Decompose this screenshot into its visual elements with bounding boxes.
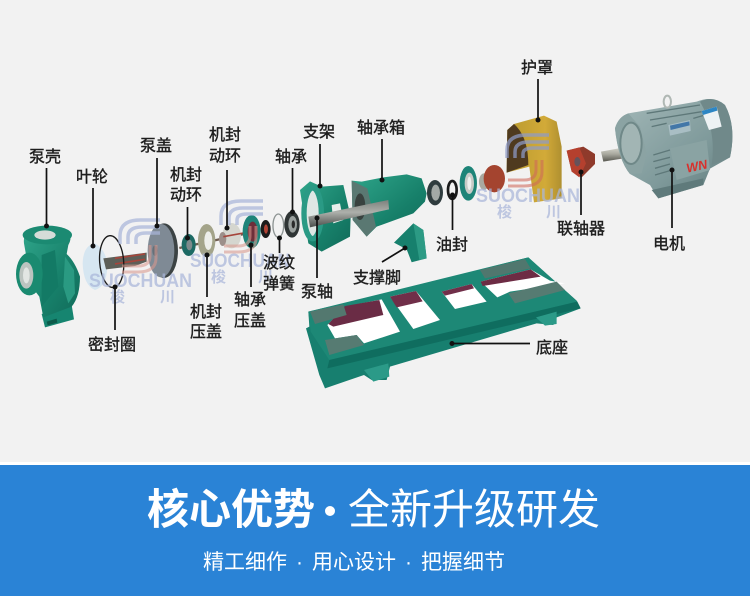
watermark: left bbox=[89, 220, 192, 306]
label: 轴承压盖 bbox=[234, 242, 266, 330]
pump casing bbox=[16, 226, 80, 327]
bracket, pump shaft and bearing housing bbox=[300, 174, 427, 252]
watermark: right: 梭 bbox=[497, 203, 512, 221]
banner subtitle: · bbox=[296, 551, 303, 574]
coupling guard bbox=[507, 116, 562, 202]
label: 护罩 bbox=[521, 59, 553, 122]
label: 机封动环 left: 动环 bbox=[170, 186, 202, 204]
label: 机封动环 upper: 动环 bbox=[209, 147, 241, 165]
banner subtitle: 把握细节 bbox=[421, 551, 505, 574]
label: 泵壳: 泵壳 bbox=[29, 148, 61, 166]
label: 泵壳 bbox=[29, 148, 61, 228]
background panel bbox=[0, 0, 750, 462]
label: 轴承: 轴承 bbox=[275, 148, 307, 166]
label: 叶轮: 叶轮 bbox=[76, 168, 108, 186]
label: 底座: 底座 bbox=[536, 339, 568, 357]
banner subtitle bbox=[203, 551, 505, 574]
electric motor bbox=[601, 96, 732, 198]
banner headline: 全新升级研发 bbox=[348, 486, 600, 533]
blue banner bbox=[0, 465, 750, 596]
watermark: right: 川 bbox=[546, 204, 561, 221]
banner subtitle: · bbox=[405, 551, 412, 574]
watermark: left: SUOCHUAN bbox=[89, 270, 192, 292]
watermark: left: 川 bbox=[160, 289, 175, 306]
label: 电机 bbox=[653, 168, 685, 253]
label: 叶轮 bbox=[76, 168, 108, 248]
label: 波纹弹簧: 波纹 bbox=[263, 254, 295, 272]
label: 机封动环 upper: 机封 bbox=[209, 126, 241, 144]
label: 联轴器: 联轴器 bbox=[557, 220, 605, 238]
label: 轴承箱 bbox=[357, 119, 405, 182]
label: 油封: 油封 bbox=[436, 236, 468, 254]
motor brand: WN bbox=[685, 157, 709, 176]
label: 机封动环 left bbox=[170, 166, 202, 240]
label: 机封压盖 bbox=[190, 252, 222, 341]
watermark: center: 梭 bbox=[211, 268, 226, 286]
label: 波纹弹簧 bbox=[263, 236, 295, 293]
watermark: right: SUOCHUAN bbox=[476, 185, 580, 207]
label: 支撑脚 bbox=[353, 246, 408, 287]
label: 泵盖: 泵盖 bbox=[140, 137, 172, 155]
mechanical seal, gland, bearing cover parts bbox=[179, 211, 300, 257]
label: 泵轴 bbox=[301, 216, 333, 301]
banner headline bbox=[147, 486, 600, 533]
label: 机封压盖: 压盖 bbox=[190, 323, 222, 341]
label: 密封圈 bbox=[88, 284, 136, 354]
label: 机封动环 left: 机封 bbox=[170, 166, 202, 184]
watermark: left: 梭 bbox=[110, 288, 125, 306]
banner subtitle: 精工细作 bbox=[203, 551, 287, 574]
label: 机封动环 upper bbox=[209, 126, 241, 230]
label: 密封圈: 密封圈 bbox=[88, 336, 136, 354]
bearing, oil seal and coupling hub bbox=[427, 165, 505, 205]
label: 泵轴: 泵轴 bbox=[301, 283, 333, 301]
watermark: center: SUOCHUAN bbox=[190, 250, 290, 272]
banner headline: 核心优势 bbox=[147, 486, 315, 533]
label: 轴承 bbox=[275, 148, 307, 214]
label: 支架 bbox=[303, 123, 335, 188]
label: 波纹弹簧: 弹簧 bbox=[263, 274, 295, 293]
label: 电机: 电机 bbox=[653, 235, 685, 253]
label: 联轴器 bbox=[557, 170, 605, 238]
banner subtitle: 用心设计 bbox=[312, 551, 396, 574]
label: 轴承压盖: 压盖 bbox=[234, 312, 266, 330]
label: 机封压盖: 机封 bbox=[190, 303, 222, 321]
label: 油封 bbox=[436, 192, 468, 254]
coupling bbox=[567, 147, 595, 177]
label: 底座 bbox=[450, 339, 568, 357]
impeller, o-ring and pump cover bbox=[83, 223, 178, 290]
label: 护罩: 护罩 bbox=[521, 59, 553, 77]
label: 泵盖 bbox=[140, 137, 172, 228]
label: 轴承箱: 轴承箱 bbox=[357, 119, 405, 137]
base frame bbox=[306, 257, 581, 388]
support foot bbox=[394, 223, 427, 262]
label: 支撑脚: 支撑脚 bbox=[353, 269, 401, 287]
watermark: center bbox=[190, 201, 290, 286]
label: 轴承压盖: 轴承 bbox=[234, 291, 266, 309]
exploded pump diagram bbox=[0, 0, 750, 462]
label: 支架: 支架 bbox=[303, 123, 335, 141]
watermark: right bbox=[476, 135, 580, 221]
watermark: center: 川 bbox=[258, 269, 273, 286]
